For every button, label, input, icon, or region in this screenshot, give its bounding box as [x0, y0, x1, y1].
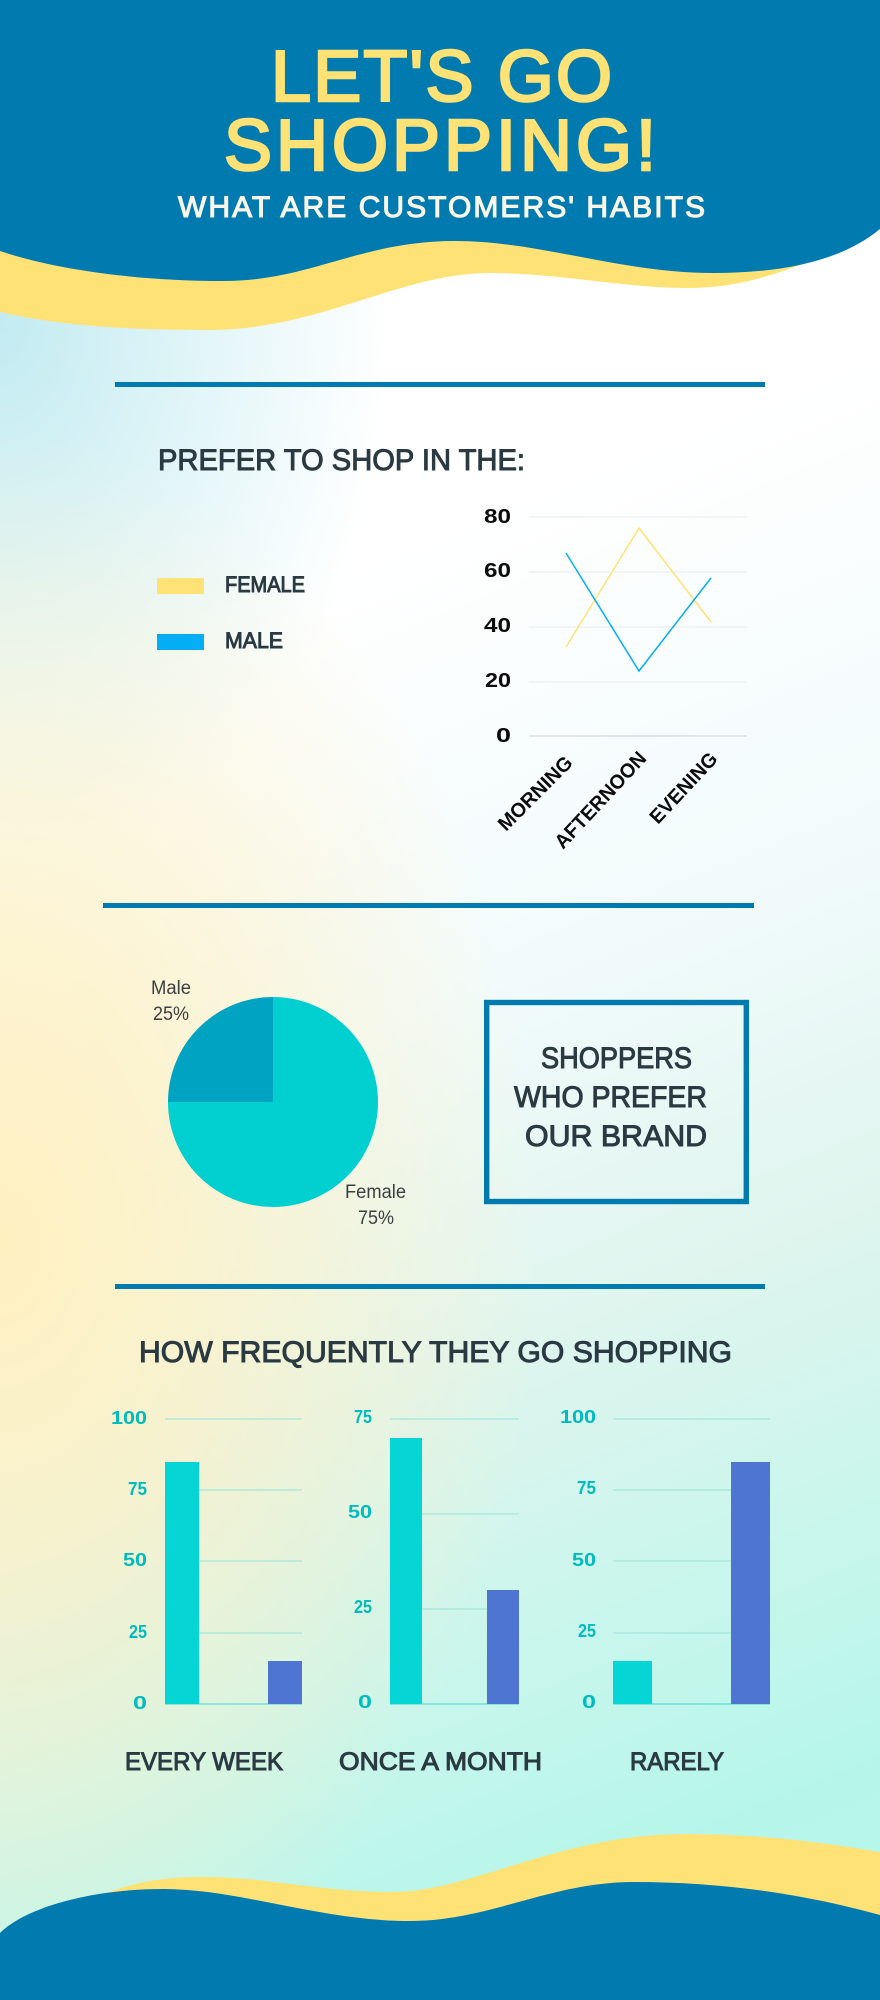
bar chart: once a month: 50	[348, 1502, 372, 1522]
pie chart: 25%	[153, 1004, 189, 1025]
line: female	[566, 528, 711, 647]
callout box	[487, 1002, 746, 1202]
bar chart: rarely: 50	[572, 1550, 596, 1570]
pie chart	[151, 978, 406, 1229]
title line 2: SHOPPING!	[224, 106, 656, 186]
heading: how frequently: HOW FREQUENTLY THEY GO SHOPPING	[139, 1336, 732, 1369]
y axis labels: 20	[485, 670, 511, 692]
legend swatch: female	[157, 578, 204, 594]
pie label: female: Female	[345, 1182, 406, 1203]
bar chart captions: ONCE A MONTH	[339, 1748, 542, 1776]
line chart	[484, 506, 747, 853]
legend swatch: male	[157, 634, 204, 650]
bar chart: every week: 25	[129, 1622, 147, 1642]
footer wave: blue	[0, 1882, 880, 2000]
header wave: yellow	[0, 200, 808, 330]
bar chart: every week: 100	[111, 1408, 147, 1428]
footer wave: yellow	[107, 1834, 880, 1950]
subtitle: WHAT ARE CUSTOMERS' HABITS	[178, 191, 705, 224]
y axis labels: 80	[484, 506, 511, 528]
bar chart captions	[125, 1748, 724, 1776]
y axis labels	[484, 506, 511, 747]
pie slice: male 25%	[168, 997, 273, 1102]
heading: prefer to shop: PREFER TO SHOP IN THE:	[158, 444, 525, 477]
bar chart: every week	[111, 1408, 302, 1713]
bar chart: once a month	[348, 1407, 519, 1712]
bar chart: rarely: 0	[582, 1692, 596, 1712]
legend label: male: MALE	[225, 628, 283, 653]
y axis labels: 40	[484, 615, 511, 637]
bar chart: rarely	[560, 1407, 770, 1712]
bar chart: once a month: 25	[354, 1597, 372, 1617]
callout box: WHO PREFER	[514, 1081, 707, 1114]
legend	[157, 572, 305, 653]
bar chart: rarely: 75	[577, 1478, 596, 1498]
pie label: male: Male	[151, 978, 191, 999]
bar chart: every week: 50	[123, 1550, 147, 1570]
pie chart: 75%	[358, 1208, 394, 1229]
bar chart: once a month: 75	[354, 1407, 372, 1427]
bar chart captions: EVERY WEEK	[125, 1748, 283, 1776]
title line 1: LET'S GO	[271, 37, 612, 117]
callout box: SHOPPERS	[541, 1042, 692, 1075]
title block	[178, 37, 705, 224]
pie slice: female 75%	[168, 997, 378, 1207]
y axis labels: 0	[496, 725, 511, 747]
bar chart: rarely: 25	[578, 1621, 596, 1641]
header wave: blue	[0, 0, 880, 281]
x axis labels: AFTERNOON	[551, 748, 651, 853]
bar chart: every week: 75	[128, 1479, 147, 1499]
x axis labels	[494, 748, 722, 853]
bar chart: rarely: 100	[560, 1407, 596, 1427]
bar chart: every week: 0	[133, 1693, 147, 1713]
legend label: female: FEMALE	[225, 572, 305, 597]
bar chart: once a month: 0	[358, 1692, 372, 1712]
x axis labels: EVENING	[646, 748, 722, 828]
callout box: OUR BRAND	[525, 1120, 707, 1153]
bar chart captions: RARELY	[630, 1748, 724, 1776]
line: male	[566, 553, 711, 671]
y axis labels: 60	[484, 560, 511, 582]
x axis labels: MORNING	[494, 752, 577, 836]
